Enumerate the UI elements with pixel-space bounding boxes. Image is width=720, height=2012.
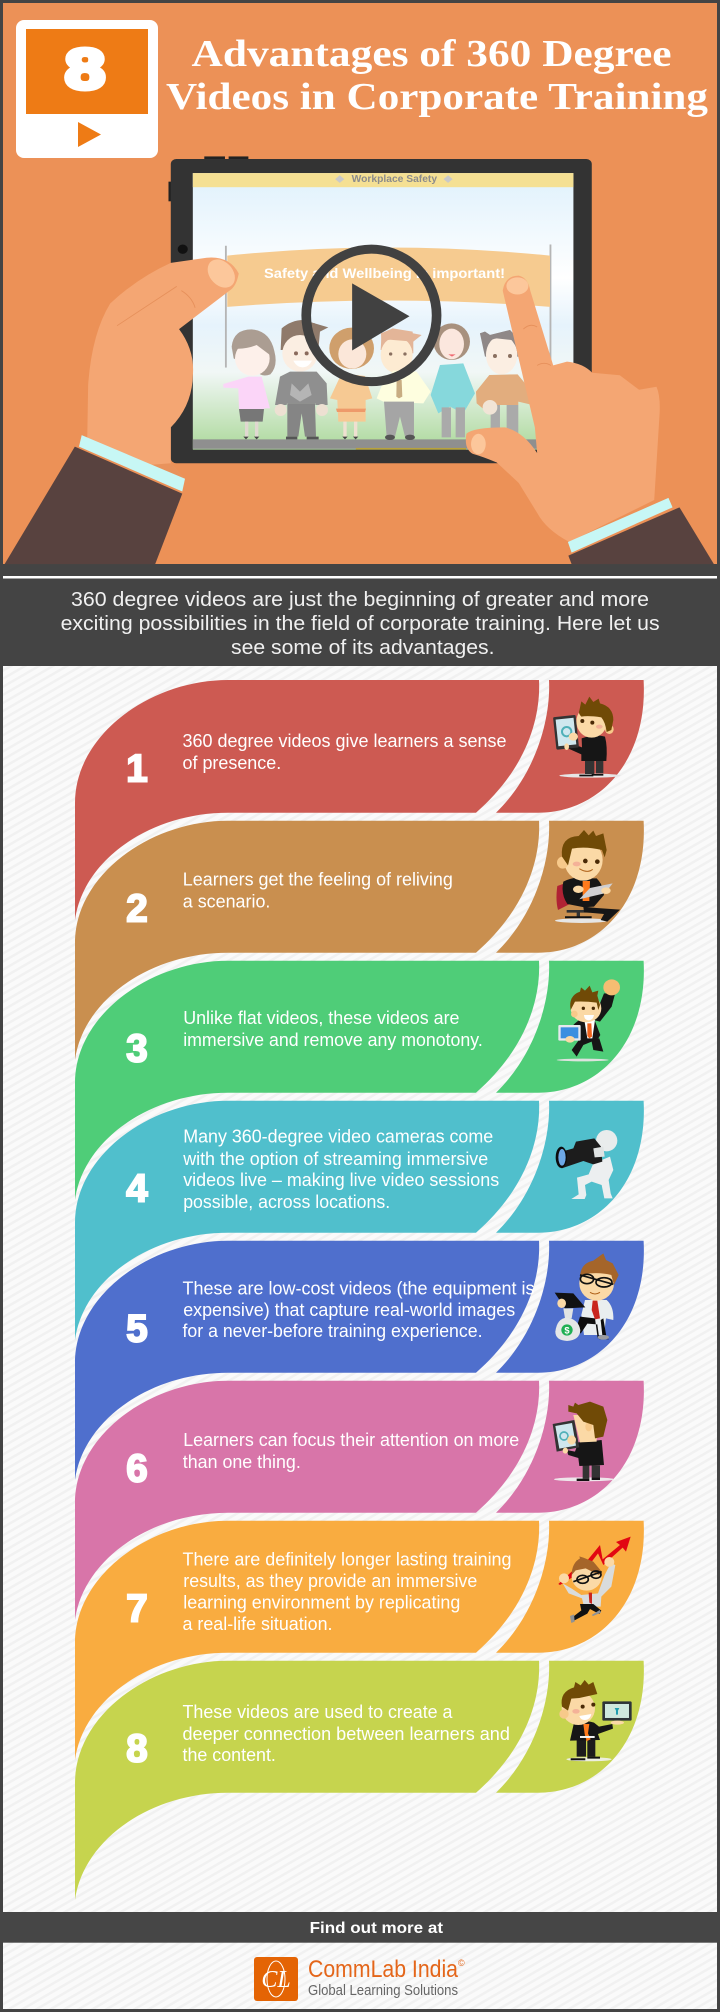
icon: play button xyxy=(306,249,437,382)
icon: man with glasses and money bag xyxy=(555,1253,619,1341)
card 2: 2 xyxy=(126,888,148,931)
icon: man presenting tablet xyxy=(559,1680,632,1761)
card 3 xyxy=(75,961,644,1200)
card 6: than one thing. xyxy=(183,1452,301,1472)
card 2: a scenario. xyxy=(183,892,270,912)
card 5: for a never-before training experience. xyxy=(182,1321,482,1341)
icon: man with tablet, back view xyxy=(553,697,621,778)
icon: man with tablet, rear view xyxy=(553,1402,614,1481)
card 7: There are definitely longer lasting training xyxy=(182,1549,512,1569)
icon: man with rising red arrow xyxy=(558,1537,631,1623)
card 7 xyxy=(75,1521,644,1760)
title: Advantages of 360 Degree xyxy=(192,33,672,75)
card 1: of presence. xyxy=(182,753,281,773)
card 1 xyxy=(75,680,644,920)
card 6 xyxy=(75,1381,644,1620)
card 3: immersive and remove any monotony. xyxy=(183,1030,483,1050)
card 4: possible, across locations. xyxy=(183,1192,390,1212)
title: Videos in Corporate Training xyxy=(166,76,708,118)
card 6: Learners can focus their attention on more xyxy=(183,1430,519,1450)
intro band: exciting possibilities in the field of corporate training. Here let us xyxy=(61,613,660,635)
intro band: see some of its advantages. xyxy=(231,637,494,659)
tablet screen xyxy=(193,173,573,450)
icon: video player with number 8: 8 xyxy=(65,38,105,102)
card 4: Many 360-degree video cameras come xyxy=(183,1127,493,1147)
icon: white figure with camera xyxy=(556,1130,617,1199)
icon: man seated with tablet xyxy=(555,830,620,923)
title xyxy=(166,33,708,118)
card 2: Learners get the feeling of reliving xyxy=(183,870,453,890)
card 3: Unlike flat videos, these videos are xyxy=(183,1008,459,1028)
card 8: deeper connection between learners and xyxy=(182,1724,510,1744)
card 1: 360 degree videos give learners a sense xyxy=(182,731,506,751)
icon: CommLab India logo mark: CL xyxy=(261,1967,291,1993)
logo wordmark: Global Learning Solutions xyxy=(308,1983,458,1999)
footer call to action xyxy=(0,1912,720,1943)
icon: man jumping with raised fist xyxy=(557,979,620,1061)
card 7: a real-life situation. xyxy=(182,1614,332,1634)
card 4: with the option of streaming immersive xyxy=(182,1149,488,1169)
card 2 xyxy=(75,821,644,1060)
card 8: 8 xyxy=(126,1728,148,1771)
card 1: 1 xyxy=(126,748,148,791)
panel: orange banner xyxy=(3,3,717,564)
card 8: These videos are used to create a xyxy=(182,1702,453,1722)
card 6: 6 xyxy=(126,1448,148,1491)
icon: left hand and sleeve xyxy=(5,255,241,564)
illustration: hands and play button xyxy=(5,249,714,564)
card 7: 7 xyxy=(126,1588,148,1631)
logo wordmark xyxy=(308,1956,465,1999)
icon: CommLab India logo mark xyxy=(254,1957,298,2001)
card 4: videos live – making live video sessions xyxy=(183,1170,499,1190)
icon: right hand and sleeve xyxy=(466,276,714,564)
card 3: 3 xyxy=(126,1028,148,1071)
footer call to action: Find out more at xyxy=(310,1920,444,1937)
card 5 xyxy=(75,1241,644,1480)
card 7: learning environment by replicating xyxy=(183,1592,460,1612)
illustration: tablet with screen xyxy=(168,156,592,463)
striped background panel xyxy=(3,666,717,1912)
logo wordmark: CommLab India xyxy=(308,1956,459,1983)
card 5: These are low-cost videos (the equipment is xyxy=(182,1278,534,1298)
logo wordmark: © xyxy=(458,1958,465,1968)
card 4: 4 xyxy=(126,1168,148,1211)
tablet screen: Safety and Wellbeing is important! xyxy=(264,266,505,282)
tablet screen: Workplace Safety xyxy=(352,173,437,185)
card 7: results, as they provide an immersive xyxy=(183,1571,477,1591)
card 4 xyxy=(75,1101,644,1340)
card 8 xyxy=(75,1661,644,1900)
intro band: 360 degree videos are just the beginning of greater and more xyxy=(71,589,649,611)
card 5: expensive) that capture real-world images xyxy=(183,1300,515,1320)
icon: man with glasses and money bag: $ xyxy=(564,1325,570,1335)
icon: video player with number 8 xyxy=(16,20,158,158)
card 5: 5 xyxy=(126,1308,148,1351)
intro band xyxy=(3,576,717,659)
card 8: the content. xyxy=(182,1745,276,1765)
footer logo panel xyxy=(3,1943,717,2009)
icon: tablet body xyxy=(168,156,592,463)
people on screen xyxy=(223,320,530,440)
